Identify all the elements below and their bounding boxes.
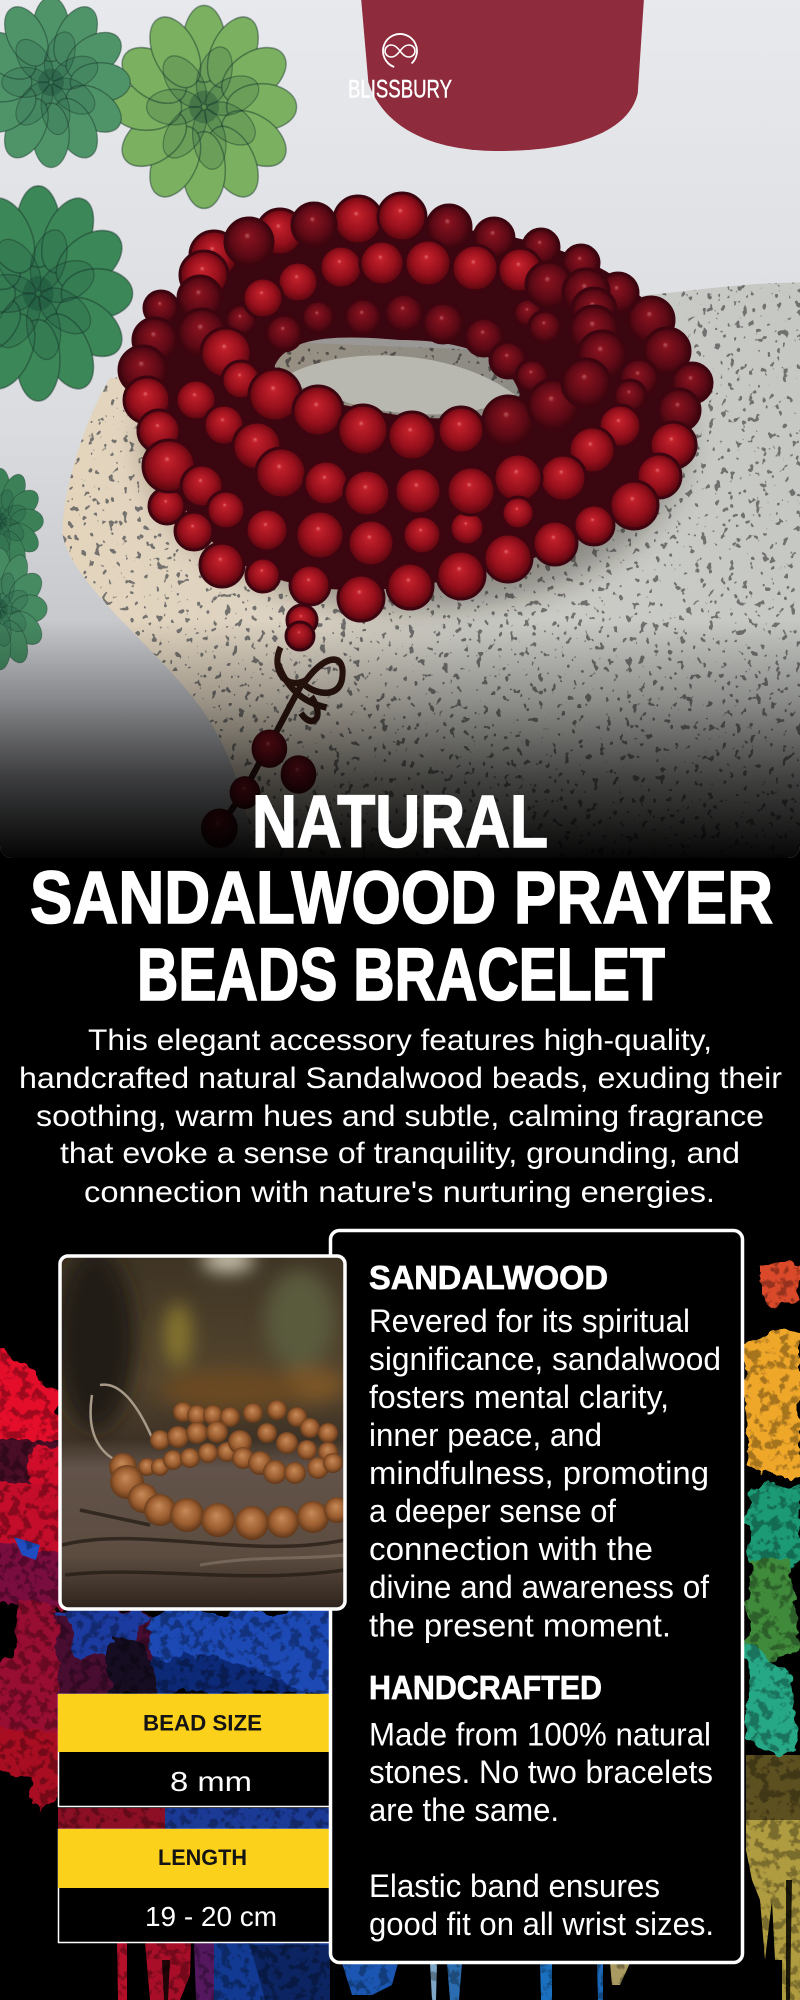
title: [30, 780, 773, 1016]
hero photo: red prayer beads on stone: [0, 0, 800, 860]
paint texture overlay: [0, 1260, 800, 2000]
paint splash: right: [745, 1264, 800, 2000]
knotted cord and tassel beads: [201, 647, 343, 848]
cup, succulents and stone backdrop: [0, 0, 800, 860]
intro paragraph: soothing, warm hues and subtle, calming fragrance: [36, 1100, 764, 1133]
spec table: length: [58, 1829, 334, 1942]
spec table: length: LENGTH: [158, 1845, 247, 1870]
logo: Blissbury: BLISSBURY: [348, 76, 452, 104]
sandalwood text: mindfulness, promoting: [369, 1455, 709, 1491]
sandalwood text: fosters mental clarity,: [369, 1379, 669, 1415]
sandalwood text: divine and awareness of: [369, 1569, 709, 1605]
sandalwood text: connection with the: [369, 1531, 653, 1567]
sandalwood text: [369, 1303, 721, 1644]
sandalwood text: inner peace, and: [369, 1417, 602, 1453]
sandalwood beads: [109, 1400, 350, 1540]
description panel: [330, 1230, 742, 1962]
title: BEADS BRACELET: [137, 933, 665, 1016]
intro paragraph: This elegant accessory features high-quality,: [88, 1024, 712, 1057]
bracelet shadow: [130, 338, 700, 626]
wooden plank cracks: [62, 1510, 345, 1576]
spec table: bead size: BEAD SIZE: [143, 1710, 262, 1736]
blurred forest backdrop: [55, 1248, 345, 1430]
paint splash: behind tables: [58, 1611, 335, 1830]
mala beads, sides and front rows: [124, 328, 484, 592]
title: NATURAL: [252, 780, 548, 863]
handcrafted text: Made from 100% natural: [369, 1716, 711, 1752]
intro paragraph: handcrafted natural Sandalwood beads, exuding their: [19, 1062, 782, 1095]
bracelet dark body: [150, 226, 682, 590]
twine strands: [91, 1385, 155, 1465]
mala beads, back rows: [133, 205, 638, 392]
intro paragraph: that evoke a sense of tranquility, grounding, and: [60, 1137, 740, 1170]
paint splash: left: [0, 1349, 70, 1815]
handcrafted text: are the same.: [369, 1792, 559, 1828]
spec table: bead size: [58, 1694, 334, 1806]
sandalwood text: significance, sandalwood: [369, 1341, 721, 1377]
heading: sandalwood: SANDALWOOD: [369, 1259, 608, 1296]
logo: Blissbury: [348, 29, 452, 103]
intro paragraph: connection with nature's nurturing energies.: [84, 1176, 715, 1209]
sandalwood text: a deeper sense of: [369, 1493, 616, 1529]
spec table: bead size: 8 mm: [170, 1766, 252, 1797]
sandalwood text: the present moment.: [369, 1608, 671, 1644]
spec table: length: 19 - 20 cm: [145, 1901, 277, 1932]
succulents: [0, 0, 297, 670]
handcrafted text: good fit on all wrist sizes.: [369, 1906, 714, 1942]
sandalwood text: Revered for its spiritual: [369, 1303, 690, 1339]
handcrafted text: Elastic band ensures: [369, 1868, 660, 1904]
heading: handcrafted: HANDCRAFTED: [369, 1669, 602, 1706]
handcrafted text: [369, 1716, 714, 1942]
sandalwood photo card: [55, 1248, 350, 1609]
stone: [62, 282, 800, 858]
red cup: [361, 0, 644, 151]
paint drips: bottom: [117, 1942, 630, 2000]
photo bottom fade: [0, 620, 800, 858]
handcrafted text: stones. No two bracelets: [369, 1754, 713, 1790]
intro paragraph: [19, 1024, 782, 1209]
